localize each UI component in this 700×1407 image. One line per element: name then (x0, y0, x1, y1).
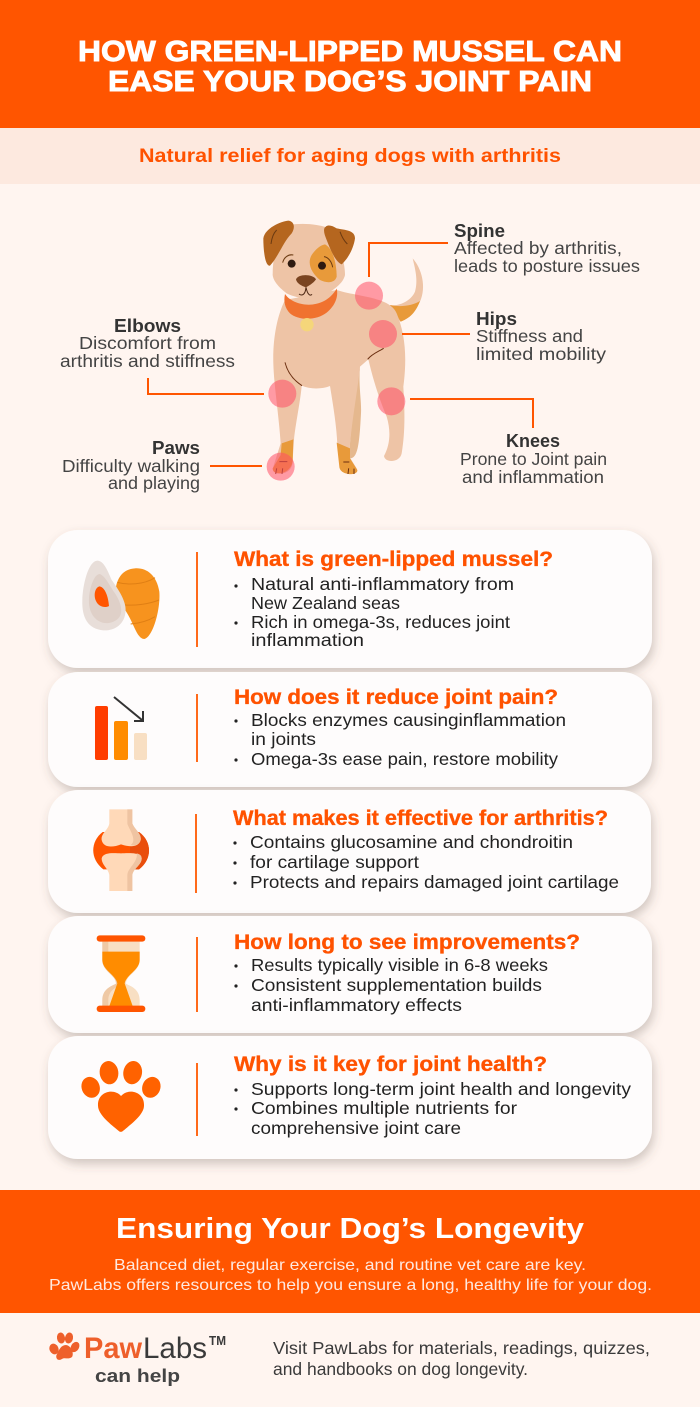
callout: knees: Knees (506, 430, 560, 451)
text: heading and bullets: anti-inflammatory effects (251, 995, 462, 1015)
callout: elbows: arthritis and stiffness (60, 351, 235, 371)
callout: knees: and inflammation (462, 467, 604, 487)
callout: elbows: Elbows (114, 315, 181, 336)
text: heading and bullets: New Zealand seas (251, 593, 400, 613)
callout: hips: Hips (476, 308, 517, 329)
text: heading and bullets: inflammation (251, 630, 364, 650)
callout: paws: Paws (152, 437, 200, 458)
panel: why is it key for joint health (48, 1036, 652, 1159)
joint markers (267, 282, 405, 481)
text: heading and bullets: Consistent supplementation builds (251, 975, 542, 995)
icon: knee joint (93, 809, 149, 891)
nose and mouth (296, 275, 316, 287)
callout connectors (148, 243, 533, 466)
divider (195, 814, 197, 893)
text: heading and bullets: for cartilage support (250, 852, 419, 872)
panel: how does it reduce joint pain (48, 672, 652, 787)
text: heading and bullets: Supports long-term joint health and longevity (251, 1079, 631, 1099)
text: heading and bullets: What is green-lipped mussel? (234, 548, 553, 571)
text: heading and bullets: How long to see improvements? (234, 931, 580, 954)
logo: PawLabs can help: Labs (143, 1332, 207, 1365)
divider (196, 694, 198, 762)
rear far leg shade (349, 367, 361, 458)
logo: PawLabs can help (48, 1332, 226, 1386)
text: heading and bullets: Rich in omega-3s, reduces joint (251, 612, 510, 632)
text: heading and bullets (233, 807, 619, 892)
text: heading and bullets: Natural anti-inflammatory from (251, 574, 514, 594)
panel: what makes it effective (48, 790, 651, 913)
banner: ensuring longevity (0, 1190, 700, 1313)
text: heading and bullets (234, 548, 553, 650)
callout: spine: Affected by arthritis, (454, 238, 622, 258)
icon: hourglass (97, 935, 145, 1012)
divider (196, 1063, 198, 1136)
divider (196, 937, 198, 1012)
text: heading and bullets (234, 1053, 631, 1138)
text: heading and bullets: What makes it effective for arthritis? (233, 807, 608, 830)
callout: spine (454, 220, 640, 276)
text: heading and bullets: Combines multiple nutrients for (251, 1098, 517, 1118)
callout: knees: Prone to Joint pain (460, 449, 607, 469)
callout: spine: leads to posture issues (454, 256, 640, 276)
eyes (288, 260, 296, 268)
banner: ensuring longevity: Balanced diet, regular exercise, and routine vet care are key. (114, 1257, 586, 1274)
subtitle band: Natural relief for aging dogs with arthritis (139, 146, 561, 167)
subtitle band (0, 128, 700, 184)
panel: how long to see improvements (48, 916, 652, 1033)
text: heading and bullets (234, 686, 566, 769)
callout: hips: Stiffness and (476, 326, 583, 346)
callout: spine: Spine (454, 220, 505, 241)
title: HOW GREEN-LIPPED MUSSEL CAN (78, 36, 622, 68)
paws (273, 439, 293, 473)
text: heading and bullets: Results typically visible in 6-8 weeks (251, 955, 548, 975)
title: EASE YOUR DOG’S JOINT PAIN (108, 66, 592, 98)
panel: what is green-lipped mussel (48, 530, 652, 668)
icon: heart paw (78, 1060, 164, 1132)
text: heading and bullets (234, 931, 580, 1015)
text: visit PawLabs: Visit PawLabs for materials, readings, quizzes, (273, 1338, 650, 1358)
callout: paws (62, 437, 200, 493)
icon: mussel (82, 561, 159, 639)
icon: declining bars (95, 697, 147, 760)
callout: hips: limited mobility (476, 344, 606, 364)
text: visit PawLabs: and handbooks on dog longevity. (273, 1359, 528, 1379)
divider (196, 552, 198, 647)
text: heading and bullets: Omega-3s ease pain, restore mobility (251, 749, 558, 769)
text: heading and bullets: Blocks enzymes causinginflammation (251, 710, 566, 730)
text: visit PawLabs (273, 1338, 650, 1379)
head (273, 224, 345, 298)
callout: paws: and playing (108, 473, 200, 493)
ears (263, 221, 294, 266)
text: heading and bullets: in joints (251, 729, 316, 749)
banner: ensuring longevity: PawLabs offers resources to help you ensure a long, healthy life for your dog. (49, 1277, 652, 1294)
tail (390, 258, 423, 322)
logo: PawLabs can help: Paw (84, 1332, 143, 1365)
callout: elbows: Discomfort from (79, 333, 216, 353)
banner: ensuring longevity: Ensuring Your Dog’s Longevity (116, 1213, 584, 1245)
text: heading and bullets: Contains glucosamine and chondroitin (250, 832, 573, 852)
face patch (310, 244, 337, 282)
text: heading and bullets: How does it reduce joint pain? (234, 686, 558, 709)
callout: hips (476, 308, 606, 364)
body (273, 290, 405, 474)
body creases (285, 348, 384, 386)
callout: paws: Difficulty walking (62, 456, 200, 476)
collar (284, 289, 337, 319)
text: heading and bullets: Protects and repairs damaged joint cartilage (250, 872, 619, 892)
text: heading and bullets: Why is it key for joint health? (234, 1053, 547, 1076)
illustration: dog with affected joints (263, 221, 423, 481)
tag (300, 318, 314, 331)
callout: elbows (60, 315, 235, 371)
header banner (0, 0, 700, 128)
text: heading and bullets: comprehensive joint care (251, 1118, 461, 1138)
logo: PawLabs can help: can help (95, 1366, 180, 1386)
callout: knees (460, 430, 607, 487)
title (78, 36, 622, 98)
icon: paw (48, 1332, 81, 1360)
logo: PawLabs can help: TM (209, 1333, 226, 1348)
